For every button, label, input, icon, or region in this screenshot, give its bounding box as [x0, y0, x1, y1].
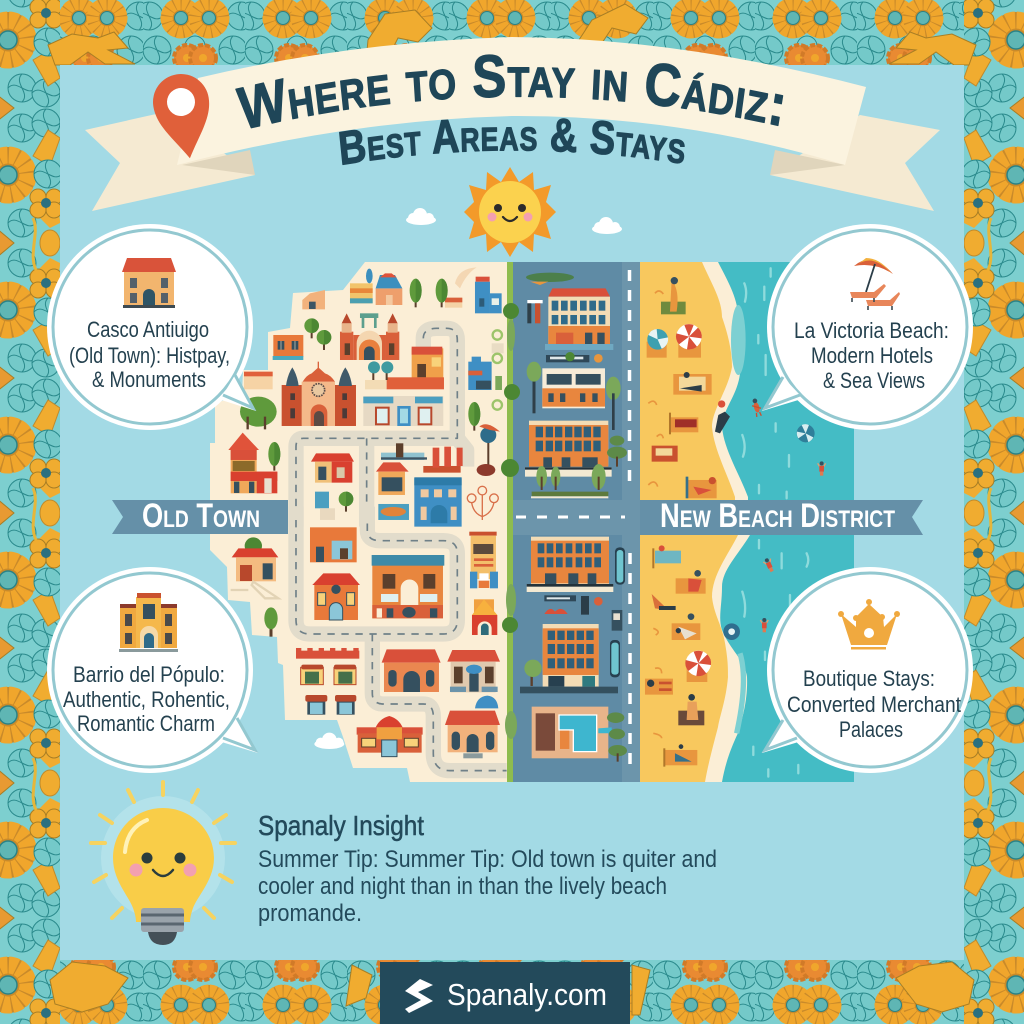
text: & Monuments	[92, 367, 206, 392]
title line two: Best Areas & Stays	[339, 118, 685, 166]
upper hotels and beach	[525, 268, 826, 498]
title line two	[339, 118, 685, 166]
roads upper	[296, 328, 467, 527]
buildings lower	[231, 527, 500, 758]
road markings	[628, 270, 632, 770]
insight body	[258, 846, 717, 927]
church	[340, 332, 353, 360]
insight body: Summer Tip: Summer Tip: Old town is quiter and	[258, 846, 717, 873]
trees	[240, 397, 277, 427]
icon: S logo	[405, 979, 433, 1013]
house mid	[311, 453, 354, 462]
cathedral	[282, 385, 302, 426]
hotels lower	[520, 537, 627, 762]
text: La Victoria Beach:	[794, 318, 949, 343]
map: new beach district	[501, 262, 854, 782]
red house	[228, 433, 259, 450]
text: Casco Antiuigo	[87, 317, 209, 342]
callout: casco antiguo	[47, 224, 256, 430]
logo text: Spanaly.com	[447, 977, 607, 1012]
text: Palaces	[839, 717, 903, 742]
insight heading: Spanaly Insight	[258, 810, 424, 841]
hedge trees	[501, 303, 520, 739]
callout: boutique stays	[762, 567, 973, 773]
location pin	[149, 70, 218, 163]
text	[787, 666, 961, 742]
lower hotels and beach	[520, 537, 808, 777]
sand	[640, 262, 738, 782]
lower town	[231, 507, 507, 771]
left fold	[182, 150, 255, 175]
land	[210, 262, 507, 782]
district ground	[510, 262, 640, 782]
left ribbon tail	[85, 112, 255, 211]
text	[63, 662, 230, 736]
text	[794, 318, 949, 393]
arcades	[382, 649, 441, 663]
right fold	[770, 150, 845, 175]
fort	[296, 651, 359, 659]
beachgoers lower	[645, 545, 776, 767]
icon: umbrella and loungers	[850, 258, 900, 310]
right ribbon tail	[770, 115, 940, 211]
text: Boutique Stays:	[803, 666, 935, 691]
callout: la victoria beach	[762, 224, 973, 430]
upper town	[228, 267, 504, 527]
hotels upper	[525, 273, 627, 498]
callout: barrio del populo	[47, 567, 258, 773]
roads lower	[296, 507, 507, 771]
text: (Old Town): Histpay,	[69, 343, 230, 368]
text: & Sea Views	[823, 368, 925, 393]
text: Romantic Charm	[77, 711, 215, 736]
title line one: Where to Stay in Cádiz:	[235, 54, 784, 128]
cloud left	[406, 208, 436, 225]
courtyard palace	[412, 348, 443, 388]
cross street	[510, 500, 640, 535]
beachgoers upper	[647, 277, 826, 498]
label: new beach district: New Beach District	[660, 497, 895, 535]
buildings upper	[228, 267, 504, 527]
text: Authentic, Rohentic,	[63, 687, 230, 712]
text: Converted Merchant	[787, 692, 961, 717]
ripples upper	[742, 268, 789, 498]
sea	[700, 262, 854, 782]
palm	[485, 437, 491, 468]
avenue	[622, 262, 640, 782]
ripples lower	[742, 540, 808, 777]
icon: palace	[119, 593, 178, 652]
title banner	[85, 37, 940, 211]
text	[69, 317, 230, 392]
red hall	[357, 727, 423, 735]
text: Modern Hotels	[811, 343, 933, 368]
icon: crown	[838, 599, 900, 650]
main panel	[60, 65, 964, 960]
icon: smiling light bulb	[91, 782, 235, 945]
cloud right	[592, 217, 622, 234]
label: old town: Old Town	[142, 497, 260, 535]
right small	[468, 362, 492, 390]
insight body: cooler and night than in than the lively beach	[258, 873, 667, 900]
greenery strip	[507, 262, 513, 782]
icon: smiling sun	[464, 167, 556, 257]
icon: house	[122, 258, 176, 308]
foam	[690, 262, 750, 782]
insight body: promande.	[258, 900, 362, 927]
insight text block	[258, 810, 717, 927]
logo bar	[380, 962, 630, 1024]
main ribbon	[177, 37, 866, 165]
map: old town	[210, 262, 507, 782]
text: Barrio del Pópulo:	[73, 662, 225, 687]
